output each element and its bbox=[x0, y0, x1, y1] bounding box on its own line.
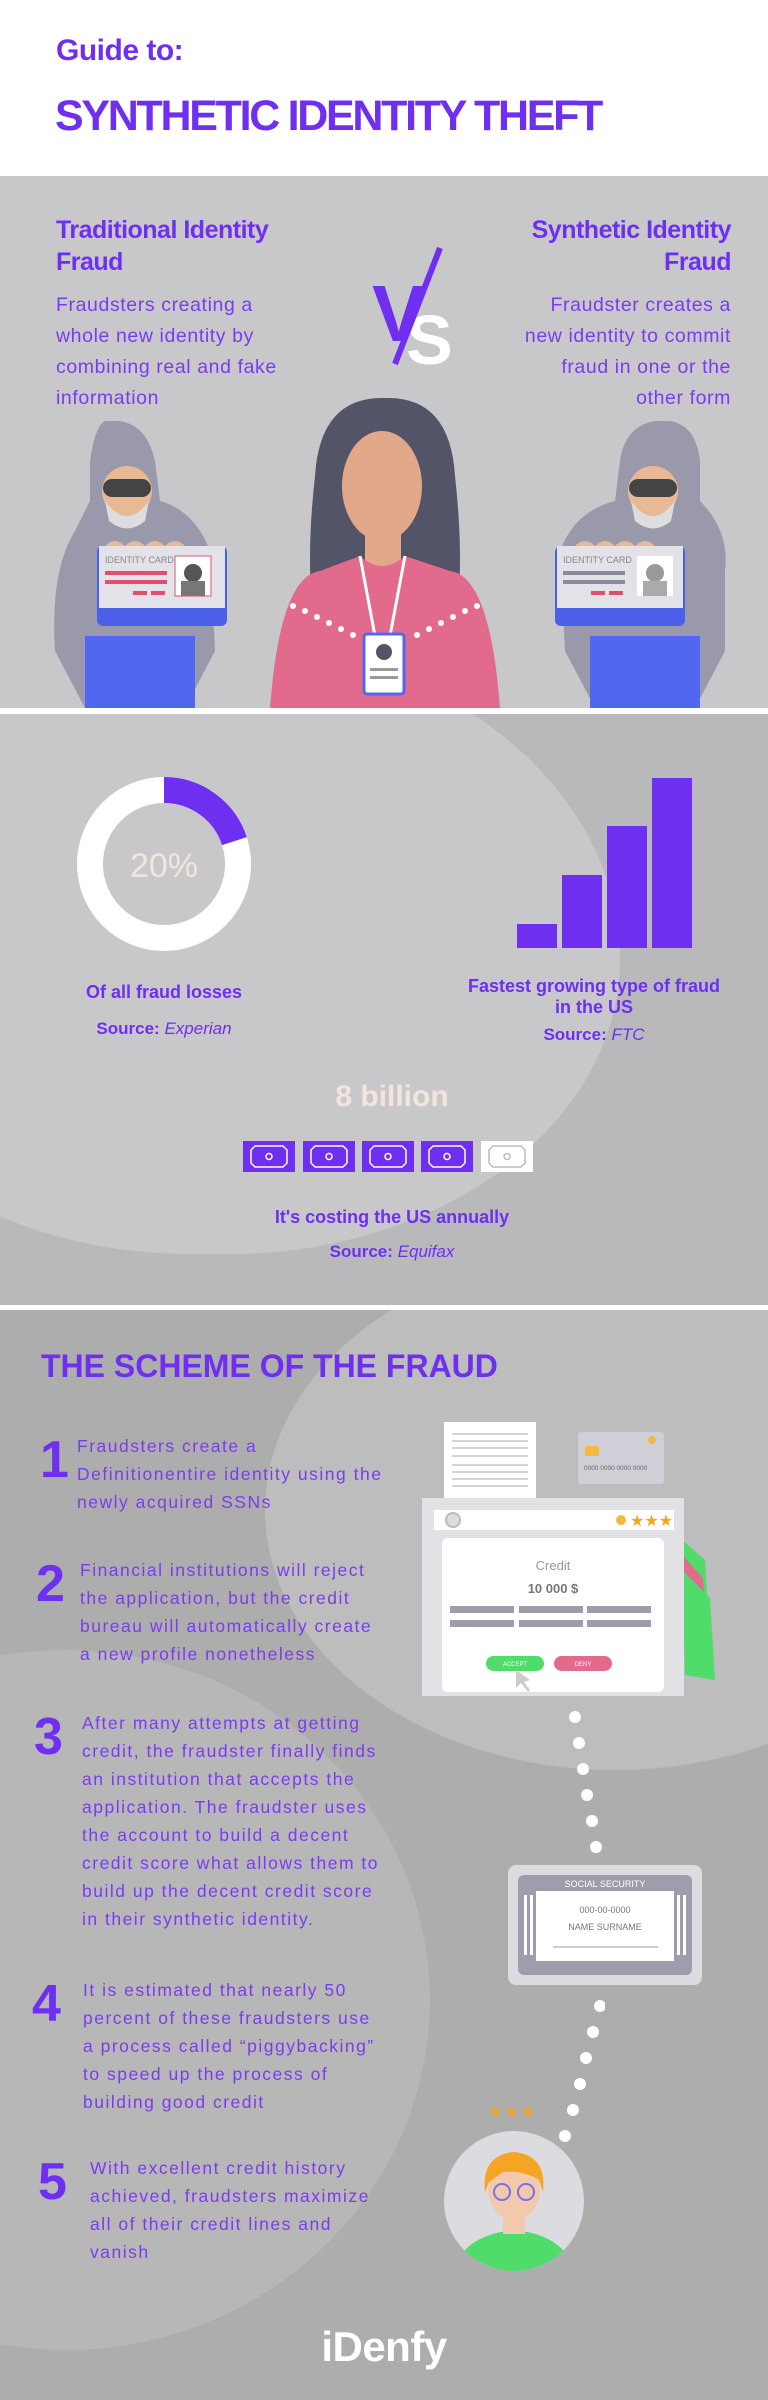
heading: traditional bbox=[56, 216, 269, 276]
step 4: It is estimated that nearly 50 bbox=[83, 1980, 347, 2000]
header: guide label: Guide to: bbox=[56, 34, 183, 67]
text: bar caption bbox=[468, 976, 720, 1044]
text: bar caption: Source: FTC bbox=[543, 1025, 645, 1044]
illustration: left fraudster: IDENTITY CARD bbox=[105, 555, 174, 565]
text: synthetic description: other form bbox=[636, 387, 731, 409]
text: synthetic description: Fraudster creates a bbox=[551, 294, 731, 316]
step 3: the account to build a decent bbox=[82, 1825, 349, 1845]
header: main title: SYNTHETIC IDENTITY THEFT bbox=[55, 92, 601, 140]
step 4: 4 bbox=[32, 1975, 61, 2033]
step 3 bbox=[34, 1708, 379, 1929]
step 1: Definitionentire identity using the bbox=[77, 1464, 382, 1484]
heading: scheme title: THE SCHEME OF THE FRAUD bbox=[41, 1348, 498, 1384]
step 4: percent of these fraudsters use bbox=[83, 2008, 371, 2028]
illustration: social security card: SOCIAL SECURITY bbox=[565, 1879, 645, 1889]
step 3: in their synthetic identity. bbox=[82, 1909, 314, 1929]
heading: synthetic: Synthetic Identity bbox=[532, 216, 731, 244]
text: donut caption bbox=[86, 982, 242, 1038]
step 4 bbox=[32, 1975, 375, 2112]
illustration: social security card bbox=[508, 1865, 702, 1985]
text: traditional description bbox=[56, 294, 277, 409]
step 5: vanish bbox=[90, 2242, 150, 2262]
illustration: credit application window: Credit bbox=[536, 1558, 571, 1573]
panel: statistics bbox=[0, 714, 768, 1305]
step 1 bbox=[40, 1431, 382, 1512]
illustration: woman with badge bbox=[270, 398, 500, 708]
illustration: social security card: NAME SURNAME bbox=[568, 1922, 642, 1932]
text: cost caption bbox=[275, 1207, 509, 1261]
illustration: credit application window: ACCEPT bbox=[503, 1662, 528, 1668]
text: bar caption: in the US bbox=[555, 997, 633, 1017]
step 2 bbox=[36, 1555, 372, 1664]
panel: fraud scheme: building good credit bbox=[83, 2092, 265, 2112]
text: traditional description: combining real and fake bbox=[56, 356, 277, 378]
icons: money bills bbox=[243, 1141, 533, 1172]
text: cost caption: Source: Equifax bbox=[330, 1242, 454, 1261]
text: donut caption: Of all fraud losses bbox=[86, 982, 242, 1002]
step 5 bbox=[38, 2153, 370, 2262]
donut chart: 20% bbox=[77, 777, 251, 951]
text: cost caption: It's costing the US annually bbox=[275, 1207, 509, 1227]
step 3: build up the decent credit score bbox=[82, 1881, 373, 1901]
step 2: a new profile nonetheless bbox=[80, 1644, 316, 1664]
step 1: newly acquired SSNs bbox=[77, 1492, 272, 1512]
illustration: credit application window: ★★★ bbox=[630, 1511, 673, 1530]
illustration: left fraudster bbox=[54, 421, 227, 708]
heading: synthetic: Fraud bbox=[664, 248, 731, 276]
heading: synthetic bbox=[532, 216, 732, 276]
stars above avatar: ★★★ bbox=[488, 2102, 537, 2121]
text: synthetic description bbox=[525, 294, 731, 409]
stat: 8 billion: 8 billion bbox=[335, 1080, 449, 1113]
text: bar caption: Fastest growing type of fraud bbox=[468, 976, 720, 996]
step 3: 3 bbox=[34, 1708, 63, 1766]
icon: VS bbox=[372, 246, 453, 376]
step 3: After many attempts at getting bbox=[82, 1713, 360, 1733]
step 2: 2 bbox=[36, 1555, 65, 1613]
step 2: Financial institutions will reject bbox=[80, 1560, 365, 1580]
heading: traditional: Traditional Identity bbox=[56, 216, 268, 244]
text: donut caption: Source: Experian bbox=[96, 1019, 232, 1038]
step 2: bureau will automatically create bbox=[80, 1616, 372, 1636]
connector dots: upper bbox=[569, 1711, 602, 1853]
step 1: 1 bbox=[40, 1431, 69, 1489]
donut chart: 20%: 20% bbox=[130, 847, 198, 885]
illustration: avatar bbox=[444, 2131, 584, 2271]
step 3: credit score what allows them to bbox=[82, 1853, 379, 1873]
step 3: credit, the fraudster finally finds bbox=[82, 1741, 377, 1761]
step 3: application. The fraudster uses bbox=[82, 1797, 367, 1817]
text: traditional description: whole new identity by bbox=[56, 325, 254, 347]
step 1: Fraudsters create a bbox=[77, 1436, 257, 1456]
step 2: the application, but the credit bbox=[80, 1588, 350, 1608]
illustration: credit application window: 10 000 $ bbox=[528, 1581, 579, 1596]
icon: VS: V bbox=[372, 269, 425, 358]
illustration: right fraudster: IDENTITY CARD bbox=[563, 555, 632, 565]
step 5: achieved, fraudsters maximize bbox=[90, 2186, 370, 2206]
step 4: a process called “piggybacking” bbox=[83, 2036, 375, 2056]
illustration: credit application window: DENY bbox=[575, 1662, 591, 1668]
step 4: to speed up the process of bbox=[83, 2064, 328, 2084]
text: synthetic description: fraud in one or the bbox=[561, 356, 731, 378]
text: synthetic description: new identity to commit bbox=[525, 325, 731, 347]
illustration: credit application window: 0000 0000 0000 0000 bbox=[584, 1465, 648, 1472]
illustration: right fraudster bbox=[555, 421, 726, 708]
connector dots: lower bbox=[559, 2000, 605, 2142]
illustration: social security card: 000-00-0000 bbox=[579, 1905, 631, 1915]
panel: comparison bbox=[0, 176, 768, 708]
step 5: 5 bbox=[38, 2153, 67, 2211]
step 3: an institution that accepts the bbox=[82, 1769, 355, 1789]
illustration: credit application window bbox=[422, 1422, 715, 1696]
logo: iDenfy: iDenfy bbox=[321, 2323, 447, 2370]
step 5: all of their credit lines and bbox=[90, 2214, 332, 2234]
bar chart: growth bbox=[517, 778, 692, 948]
text: traditional description: information bbox=[56, 387, 159, 409]
panel: fraud scheme bbox=[0, 1310, 768, 2400]
text: traditional description: Fraudsters creating a bbox=[56, 294, 253, 316]
heading: traditional: Fraud bbox=[56, 248, 123, 276]
step 5: With excellent credit history bbox=[90, 2158, 346, 2178]
